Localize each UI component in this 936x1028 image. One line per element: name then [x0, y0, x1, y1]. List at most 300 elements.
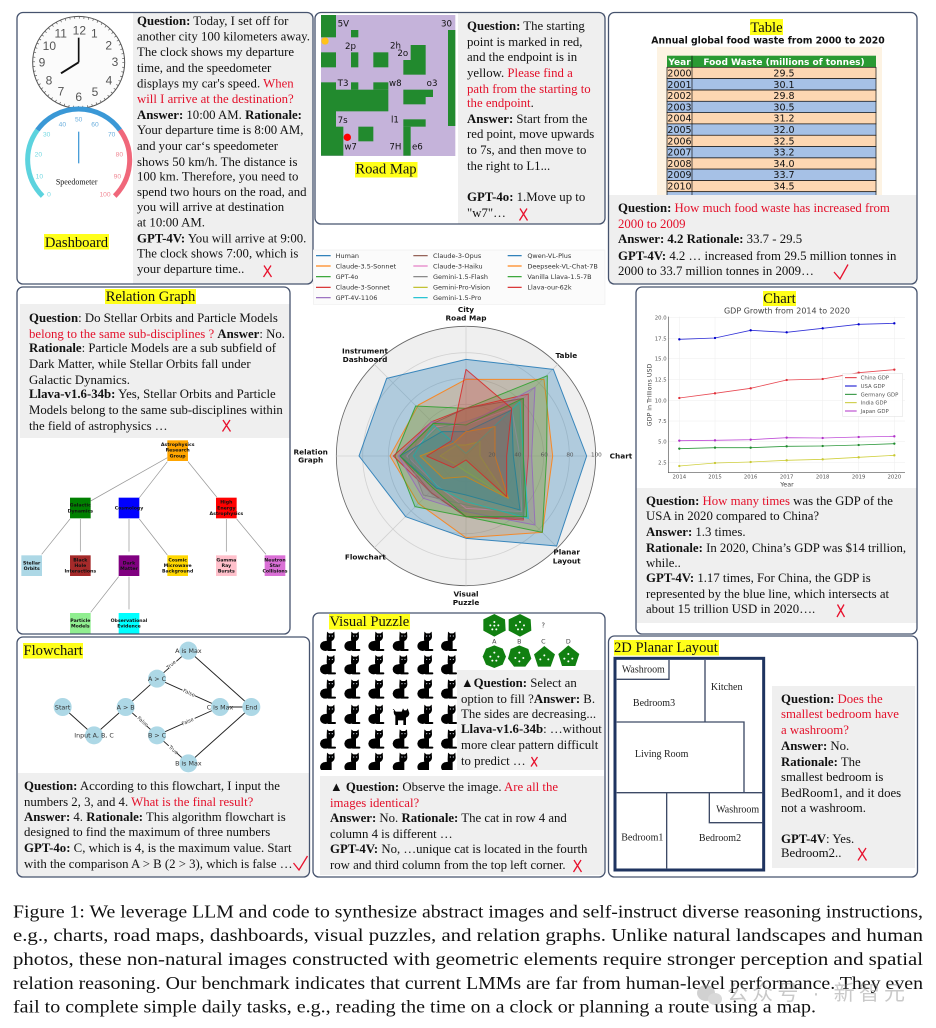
table chart: annual food waste: 2007 — [667, 148, 692, 159]
icon: speedometer: 30 — [43, 132, 51, 139]
relation tree diagram: High — [220, 500, 232, 506]
text background: road map — [458, 13, 605, 224]
icon: speedometer: 70 — [108, 132, 116, 139]
floor plan: Bedroom3 — [633, 698, 675, 709]
text block: planar layout question and answers: a washroom? — [781, 723, 849, 737]
text block: cat puzzle question: ▲ Question: Observe the image. Are all the — [330, 780, 558, 794]
heading: Table: Table — [750, 20, 783, 36]
line chart: GDP growth: GDP in Trillions USD — [646, 364, 653, 426]
icon: wrong mark — [858, 848, 866, 860]
relation tree diagram: Black — [73, 557, 88, 563]
road map grid: w7 — [344, 142, 357, 152]
table chart: annual food waste: 2006 — [667, 136, 692, 147]
flowchart diagram: End — [245, 704, 257, 711]
text block: dashboard question and answers: The clock shows my departure — [137, 45, 294, 59]
radar legend: Claude-3-Sonnet — [336, 284, 390, 292]
line chart: GDP growth: India GDP — [861, 401, 888, 407]
figure caption: Figure 1: We leverage LLM and code to synthesize abstract images and self-instruct diverse reasoning instructions, — [13, 902, 923, 922]
flowchart diagram: B is Max — [175, 761, 202, 768]
text block: road map question and answers: and the endpoint is in — [467, 50, 578, 64]
text block: table question and answers: 2000 to 33.7 million tonnes in 2009… — [618, 264, 814, 278]
text block: dashboard question and answers: shows 50 km/h. The distance is — [137, 155, 297, 169]
text block: relation graph question and answers: the field of astrophysics … — [29, 419, 168, 433]
floor plan: Bedroom2 — [699, 833, 741, 844]
road map grid: 7H — [389, 142, 401, 152]
text block: road map question and answers: red point, move upwards — [467, 127, 594, 141]
text background: polygon puzzle — [457, 670, 604, 770]
text block: dashboard question and answers: The clock shows 7:00, which is — [137, 246, 298, 260]
text block: polygon puzzle question: ▲Question: Select an — [461, 676, 577, 690]
line chart: GDP growth: 7.5 — [658, 419, 667, 425]
relation tree diagram: Microwave — [164, 563, 192, 569]
cat grid puzzle — [317, 632, 460, 774]
radar data polygons — [359, 359, 587, 546]
icon: speedometer: 20 — [35, 151, 42, 158]
radar chart: 60 — [541, 453, 548, 459]
text block: relation graph question and answers: Dark Matter, while Stellar Orbits fall under — [29, 357, 251, 371]
icon: analog clock: 8 — [46, 74, 53, 88]
table chart: annual food waste: Food Waste (millions of tonnes) — [703, 58, 865, 68]
text block: road map question and answers: the right to L1... — [467, 159, 550, 173]
heading: Visual Puzzle: Visual Puzzle — [330, 614, 409, 630]
road map grid — [321, 15, 455, 156]
line chart: GDP growth: 2019 — [852, 475, 866, 481]
table chart: annual food waste — [651, 36, 885, 203]
icon: correct mark — [294, 856, 308, 870]
icon: speedometer: 100 — [99, 191, 111, 198]
flowchart diagram: B > C — [148, 733, 167, 740]
polygon puzzle options — [483, 614, 579, 668]
table chart: annual food waste: 2010 — [667, 182, 692, 192]
floor plan: Bedroom1 — [621, 833, 663, 844]
table chart: annual food waste: 32.0 — [773, 125, 795, 136]
icon: analog clock: 11 — [54, 26, 67, 40]
icon: speedometer: 0 — [47, 191, 51, 198]
road map grid: 2h — [390, 41, 401, 51]
icon: wrong mark — [837, 604, 844, 617]
relation tree diagram: Astrophysics — [209, 511, 243, 517]
watermark: 公众号 · 新智元 — [727, 982, 905, 1005]
text block: cat puzzle question: images identical? — [330, 796, 420, 810]
line chart: GDP growth: 2016 — [744, 475, 758, 481]
text block: planar layout question and answers: GPT-4V: Yes. — [781, 832, 854, 846]
line chart: GDP growth: GDP Growth from 2014 to 2020 — [724, 307, 850, 316]
text block: planar layout question and answers: Question: Does the — [781, 692, 883, 706]
relation tree diagram: Particle — [70, 618, 90, 624]
road map grid: l1 — [391, 115, 399, 125]
radar legend: Claude-3-Haiku — [433, 262, 483, 270]
table chart: annual food waste: Annual global food waste from 2000 to 2020 — [651, 36, 885, 46]
radar chart: Instrument — [342, 347, 388, 356]
text block: dashboard question and answers: will I arrive at the destination? — [137, 92, 294, 106]
text block: dashboard question and answers: Your departure time is 8:00 AM, — [137, 123, 303, 137]
text block: dashboard question and answers: Answer: 10:00 AM. Rationale: — [137, 108, 302, 122]
floor plan — [615, 658, 764, 870]
floor plan: Washroom — [716, 804, 759, 815]
road map grid: 2p — [345, 42, 357, 52]
text block: dashboard question and answers: at 10:00 AM. — [137, 216, 205, 230]
heading: Chart: Chart — [763, 291, 796, 307]
text block: chart question and answers: GPT-4V: 1.17 times, For China, the GDP is — [646, 571, 871, 585]
text block: planar layout question and answers: Bedroom2.. — [781, 846, 841, 860]
relation tree diagram: Observational — [111, 618, 148, 624]
text block: chart question and answers: USA in 2020 compared to China? — [646, 509, 819, 523]
radar chart: 40 — [514, 453, 522, 459]
text block: flowchart question and answers: numbers 2, 3, and 4. What is the final result? — [24, 795, 254, 809]
road map grid: w8 — [389, 79, 402, 89]
radar legend: Human — [336, 252, 359, 260]
icon: analog clock: 7 — [58, 84, 65, 98]
panel: road map — [315, 12, 605, 224]
flowchart diagram: False — [182, 688, 196, 699]
line chart: GDP growth: 2014 — [673, 475, 687, 481]
text block: relation graph question and answers — [29, 311, 285, 433]
line chart: GDP growth: USA GDP — [861, 384, 886, 390]
radar legend: Llava-our-62k — [527, 284, 572, 292]
relation tree diagram: Stellar — [23, 560, 41, 566]
flowchart diagram — [54, 642, 260, 772]
text block: dashboard question and answers: and your car‘s speedometer — [137, 139, 279, 153]
radar legend: Gemini-1.5-Pro — [433, 294, 481, 302]
radar chart — [293, 305, 633, 607]
line chart: GDP growth: Year — [779, 482, 794, 489]
relation tree diagram: Collisions — [262, 569, 288, 575]
line chart: GDP growth: 20.0 — [655, 315, 667, 321]
text block: table question and answers: Answer: 4.2 Rationale: 33.7 - 29.5 — [618, 232, 802, 246]
relation tree diagram: Dark — [123, 560, 136, 566]
icon: speedometer: 60 — [91, 121, 99, 128]
panel: 2D planar layout — [608, 636, 918, 877]
text block: dashboard question and answers: time, and the speedometer — [137, 61, 272, 75]
text block: cat puzzle question: row and third column from the top left corner. — [330, 858, 566, 872]
polygon puzzle options: ? — [542, 621, 546, 629]
relation tree diagram: Energy — [217, 505, 235, 511]
text block: planar layout question and answers: smallest bedroom is — [781, 770, 883, 784]
flowchart diagram: Input A, B, C — [74, 733, 114, 740]
text block: planar layout question and answers — [781, 692, 901, 860]
text block: cat puzzle question: column 4 is different … — [330, 827, 453, 841]
radar legend: Vanilla Llava-1.5-7B — [527, 273, 592, 281]
polygon puzzle options: B — [517, 638, 522, 645]
text block: dashboard question and answers: you will arrive at destination — [137, 200, 285, 214]
figure caption: photos, these non-natural images constructed with geometric elements require stronger perception and spatial — [13, 949, 923, 969]
figure caption: fail to complete simple daily tasks, e.g., reading the time on a clock or planning a route using a map. — [13, 996, 816, 1016]
icon: analog clock: 9 — [39, 56, 46, 70]
radar chart: Table — [555, 351, 577, 360]
radar chart: Flowchart — [345, 552, 386, 561]
text block: table question and answers: 2000 to 2009 — [618, 217, 686, 231]
table chart: annual food waste: 34.0 — [773, 159, 795, 170]
text block: dashboard question and answers: another city 100 kilometers away. — [137, 30, 310, 44]
radar chart: City — [458, 305, 474, 314]
line chart: GDP growth: 5.0 — [658, 440, 667, 446]
text block: dashboard question and answers: your departure time.. — [137, 262, 244, 276]
text block: road map question and answers: Question: The starting — [467, 19, 585, 33]
text block: relation graph question and answers: Question: Do Stellar Orbits and Particle Models — [29, 311, 278, 325]
table chart: annual food waste: 2009 — [667, 170, 692, 181]
text block: road map question and answers: path from the starting to — [467, 82, 591, 96]
radar legend: Deepseek-VL-Chat-7B — [527, 262, 598, 270]
text block: polygon puzzle question — [461, 676, 602, 768]
text block: road map question and answers: yellow. Please find a — [467, 66, 573, 80]
radar legend: Qwen-VL-Plus — [527, 252, 572, 260]
heading: Road Map: Road Map — [355, 162, 417, 178]
polygon puzzle options: C — [541, 638, 546, 645]
table chart: annual food waste: 2001 — [667, 80, 692, 91]
table chart: annual food waste: 30.5 — [773, 102, 795, 113]
icon: wrong mark — [574, 860, 582, 872]
icon: analog clock: 10 — [43, 39, 56, 53]
panel: visual puzzle — [313, 613, 605, 877]
text block: chart question and answers: while.. — [646, 556, 681, 570]
road map grid: 5V — [338, 19, 349, 29]
panel: chart — [636, 287, 917, 634]
text block: flowchart question and answers: GPT-4o: C, which is 4, is the maximum value. Start — [24, 841, 292, 855]
icon: analog clock: 5 — [92, 85, 99, 99]
radar chart: Layout — [553, 556, 581, 565]
table chart: annual food waste: 30.1 — [773, 80, 795, 91]
radar legend: Claude-3-Opus — [433, 252, 482, 260]
line chart: GDP growth: 2017 — [780, 475, 793, 481]
text block: polygon puzzle question: option to fill ?Answer: B. — [461, 692, 595, 706]
relation tree diagram: Hole — [74, 563, 86, 569]
relation tree diagram: Astrophysics — [161, 442, 195, 448]
text background: flowchart — [18, 773, 309, 876]
relation tree diagram: Background — [162, 569, 193, 575]
relation tree diagram: Orbits — [24, 566, 40, 572]
relation tree diagram: Cosmology — [115, 506, 143, 512]
icon: analog clock: 3 — [112, 55, 119, 69]
radar chart: Road Map — [446, 314, 486, 323]
text block: chart question and answers — [646, 494, 906, 616]
relation tree diagram: Neutron — [264, 557, 286, 563]
radar chart: Relation — [293, 447, 328, 456]
relation tree diagram: Star — [269, 563, 281, 569]
icon: analog clock: 6 — [75, 90, 82, 104]
radar legend: Gemini-Pro-Vision — [433, 284, 490, 292]
text background: planar layout — [772, 686, 915, 868]
text block: road map question and answers — [467, 19, 594, 220]
table chart: annual food waste: 33.7 — [773, 170, 795, 181]
panel: table — [608, 12, 917, 284]
text block: planar layout question and answers: Rationale: The — [781, 755, 861, 769]
text background: chart — [636, 488, 917, 623]
text block: planar layout question and answers: smallest bedroom have — [781, 707, 899, 721]
icon: wrong mark — [222, 420, 230, 432]
radar legend: GPT-4V-1106 — [336, 294, 377, 302]
radar chart: Visual — [453, 590, 479, 599]
line chart: GDP growth: Japan GDP — [860, 409, 889, 415]
relation tree diagram: Cosmic — [168, 557, 187, 563]
figure caption: e.g., charts, road maps, dashboards, visual puzzles, and relation graphs. Unlike natural landscapes and human — [13, 925, 923, 945]
text block: dashboard question and answers: GPT-4V: You will arrive at 9:00. — [137, 232, 306, 246]
relation tree diagram: Gamma — [216, 557, 236, 563]
flowchart diagram: False — [136, 716, 149, 728]
text background: relation graph — [20, 304, 290, 438]
road map grid: o3 — [427, 79, 437, 89]
radar legend: Claude-3.5-Sonnet — [336, 262, 396, 270]
table chart: annual food waste: 32.5 — [773, 136, 795, 147]
table chart: annual food waste: 31.2 — [773, 114, 795, 125]
text block: flowchart question and answers: with the comparison A > B (2 > 3), which is false … — [24, 857, 293, 871]
relation tree diagram: Galactic — [70, 503, 91, 509]
road map grid: 30 — [441, 19, 452, 29]
figure caption: relation reasoning. Our benchmark indicates that current LMMs are far from human-level performance. They even — [13, 973, 923, 993]
polygon puzzle options: D — [566, 638, 571, 645]
icon: speedometer: 90 — [114, 173, 121, 180]
figure caption — [13, 902, 923, 1016]
table chart: annual food waste: 2004 — [667, 114, 692, 125]
flowchart diagram: False — [181, 717, 195, 727]
icon: wrong mark — [520, 208, 528, 220]
radar legend: GPT-4o — [336, 273, 358, 281]
line chart: GDP growth: 2018 — [816, 475, 830, 481]
text background: dashboard — [133, 13, 313, 284]
line chart: GDP growth: Germany GDP — [861, 392, 899, 398]
radar chart: Graph — [298, 456, 323, 465]
road map grid: 2o — [397, 49, 408, 59]
icon: speedometer: 50 — [75, 117, 83, 124]
text block: cat puzzle question — [330, 780, 588, 872]
flowchart diagram: A > C — [148, 676, 167, 683]
flowchart diagram: A > B — [117, 704, 135, 711]
text block: table question and answers — [618, 201, 897, 278]
flowchart diagram: True — [165, 659, 178, 672]
icon: analog clock: 2 — [105, 39, 112, 53]
text background: table — [609, 195, 917, 284]
floor plan: Living Room — [635, 749, 689, 760]
text block: road map question and answers: point is marked in red, — [467, 35, 583, 49]
table chart: annual food waste: 2003 — [667, 102, 692, 113]
text block: relation graph question and answers: Llava-v1.6-34b: Yes, Stellar Orbits and Particle — [29, 387, 276, 401]
text block: table question and answers: Question: How much food waste has increased from — [618, 201, 890, 215]
text block: chart question and answers: Answer: 1.3 times. — [646, 525, 746, 539]
text block: road map question and answers: to 7s, and then move to — [467, 143, 586, 157]
text block: polygon puzzle question: Llava-v1.6-34b: …without — [461, 722, 602, 736]
floor plan: Kitchen — [711, 682, 742, 693]
radar legend — [313, 250, 605, 304]
flowchart diagram: True — [166, 744, 179, 756]
road map grid: e6 — [412, 142, 423, 152]
text block: dashboard question and answers — [137, 14, 310, 276]
heading: Dashboard: Dashboard — [45, 235, 109, 251]
radar chart: Chart — [610, 452, 633, 461]
table chart: annual food waste: 2005 — [667, 125, 692, 136]
icon: analog clock: 12 — [73, 24, 86, 38]
panel: dashboard — [17, 12, 313, 284]
text block: road map question and answers: the endpoint. — [467, 96, 534, 110]
flowchart diagram: Start — [55, 704, 71, 711]
text block: table question and answers: GPT-4V: 4.2 … increased from 29.5 million tonnes in — [618, 249, 897, 263]
text block: cat puzzle question: GPT-4V: No, …unique cat is located in the fourth — [330, 842, 588, 856]
icon: correct mark — [834, 264, 848, 279]
radar chart: 100 — [591, 453, 602, 459]
line chart: GDP growth: 17.5 — [655, 336, 667, 342]
text block: road map question and answers: GPT-4o: 1.Move up to — [467, 190, 585, 204]
text block: chart question and answers: Rationale: In 2020, China’s GDP was $14 trillion, — [646, 541, 906, 555]
polygon puzzle options: A — [492, 638, 497, 645]
panel: flowchart — [17, 637, 310, 877]
line chart: GDP growth: 12.5 — [655, 378, 667, 384]
line chart: GDP growth: 2015 — [708, 475, 722, 481]
radar chart: 20 — [488, 453, 496, 459]
radar chart: Planar — [553, 548, 580, 557]
table chart: annual food waste: 29.5 — [773, 68, 795, 80]
line chart: GDP growth: 10.0 — [655, 398, 667, 404]
text block: dashboard question and answers: spend two hours on the road, and — [137, 185, 307, 199]
relation tree diagram: Interactions — [64, 569, 96, 575]
heading: 2D Planar Layout: 2D Planar Layout — [614, 640, 718, 656]
icon: speedometer: Speedometer — [56, 178, 98, 187]
flowchart diagram: A is Max — [175, 648, 202, 655]
icon: speedometer: 80 — [116, 151, 123, 158]
text block: planar layout question and answers: Answer: No. — [781, 739, 849, 753]
icon: speedometer — [28, 109, 130, 198]
table chart: annual food waste: Year — [667, 58, 691, 68]
floor plan: Washroom — [622, 665, 665, 676]
text block: dashboard question and answers: Question: Today, I set off for — [137, 14, 289, 28]
text block: chart question and answers: about 15 trillion USD in 2020…. — [646, 602, 815, 616]
road map grid: 7s — [338, 116, 348, 126]
text block: road map question and answers: "w7"… — [467, 206, 506, 220]
text block: dashboard question and answers: displays my car's speed. When — [137, 76, 294, 90]
relation tree diagram: Models — [71, 624, 90, 630]
relation tree diagram: Research — [166, 448, 190, 454]
relation tree diagram: Ray — [222, 563, 231, 569]
text background: cat puzzle — [320, 776, 604, 875]
text block: road map question and answers: Answer: Start from the — [467, 112, 588, 126]
text block: flowchart question and answers: designed to find the maximum of three numbers — [24, 825, 270, 839]
icon: analog clock: 4 — [106, 73, 113, 87]
line chart: GDP growth: 2.5 — [658, 460, 667, 466]
icon: speedometer: 10 — [36, 173, 43, 180]
table chart: annual food waste: 2002 — [667, 91, 692, 102]
text block: flowchart question and answers: Question: According to this flowchart, I input the — [24, 779, 280, 793]
text block: planar layout question and answers: not a washroom. — [781, 801, 866, 815]
text block: polygon puzzle question: more clear pattern difficult — [461, 738, 599, 752]
flowchart diagram: C is Max — [207, 704, 234, 711]
table chart: annual food waste: 2000 — [667, 68, 692, 80]
text block: planar layout question and answers: BedRoom1, and it does — [781, 786, 901, 800]
road map grid: T3 — [337, 79, 348, 89]
radar chart: Puzzle — [453, 598, 479, 607]
line chart: GDP growth — [646, 307, 905, 489]
text block: relation graph question and answers: Galactic Dynamics. — [29, 373, 130, 387]
line chart: GDP growth: 15.0 — [655, 357, 667, 363]
relation tree diagram: Dynamics — [68, 508, 93, 514]
icon: wrong mark — [264, 266, 272, 277]
line chart: GDP growth: 2020 — [888, 475, 902, 481]
table chart: annual food waste: 34.5 — [773, 182, 795, 192]
heading: Flowchart: Flowchart — [24, 643, 83, 659]
table chart: annual food waste: 33.2 — [773, 148, 795, 159]
text block: relation graph question and answers: Rationale: Particle Models are a sub subfield of — [29, 341, 277, 355]
text block: cat puzzle question: Answer: No. Rationale: The cat in row 4 and — [330, 811, 567, 825]
text block: polygon puzzle question: to predict … — [461, 754, 526, 768]
table chart: annual food waste: 2008 — [667, 159, 692, 170]
icon: wrong mark — [531, 757, 538, 766]
text block: relation graph question and answers: Models belong to the same sub-disciplines within — [29, 403, 283, 417]
panel: relation graph — [17, 287, 290, 634]
icon: analog clock: 1 — [91, 26, 98, 40]
table chart: annual food waste: 29.8 — [773, 91, 795, 102]
relation tree diagram: Evidence — [117, 624, 141, 630]
icon: speedometer: 40 — [59, 121, 66, 128]
relation tree diagram: Group — [170, 453, 186, 459]
radar chart: Dashboard — [343, 355, 387, 364]
icon: analog clock — [33, 16, 125, 108]
text block: flowchart question and answers: Answer: 4. Rationale: This algorithm flowchart is — [24, 810, 286, 824]
